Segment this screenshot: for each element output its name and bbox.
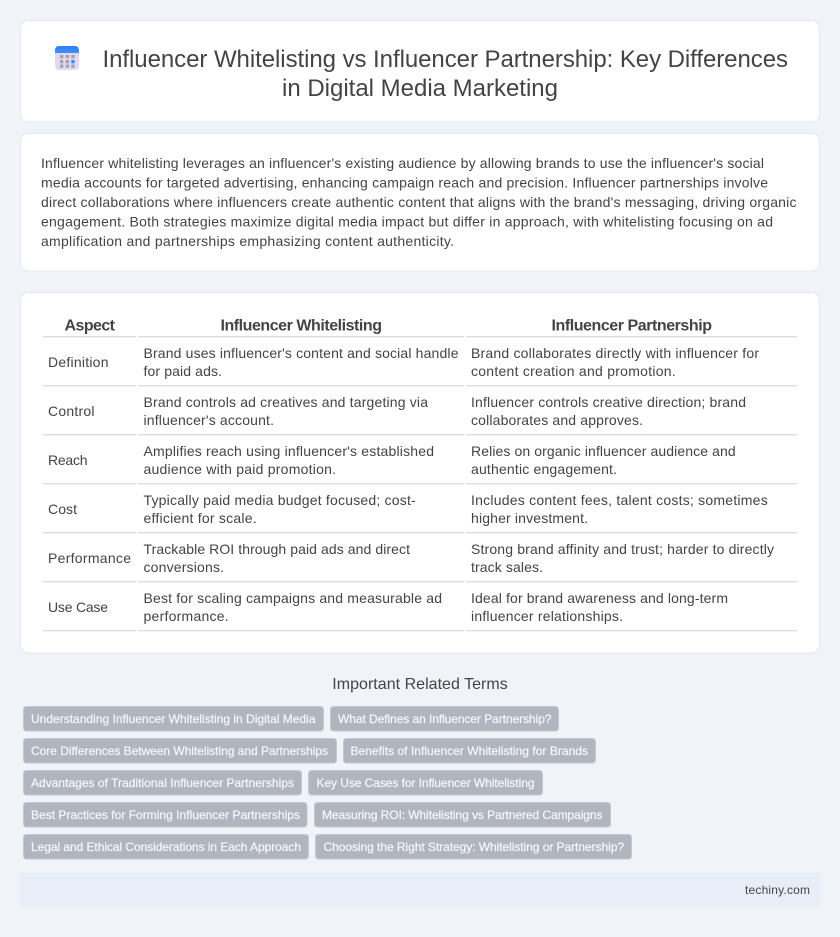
tag: What Defines an Influencer Partnership? (338, 712, 552, 726)
tag (316, 834, 632, 859)
table row: performance: track sales. (471, 559, 543, 575)
table row: performance: Strong brand affinity and trust; harder to directly (471, 541, 774, 557)
text block: introduction: media accounts for targeted advertising, enhancing campaign reach and precision. Influencer partnerships involve (41, 174, 768, 190)
text block: introduction: amplification and partnerships emphasizing content authenticity. (41, 233, 454, 249)
table row: reach (43, 443, 797, 484)
table header (43, 318, 797, 337)
tag: Core Differences Between Whitelisting and Partnerships (31, 744, 328, 758)
table header: Influencer Partnership (552, 318, 712, 334)
footer (20, 873, 820, 907)
table row: performance: Trackable ROI through paid ads and direct (144, 541, 410, 557)
table row: cost (43, 492, 797, 533)
related term tags (24, 706, 632, 859)
table row: definition: Definition (48, 354, 108, 370)
table header: Aspect (64, 318, 116, 334)
tag: Choosing the Right Strategy: Whitelisting or Partnership? (324, 840, 624, 854)
tag: Best Practices for Forming Influencer Partnerships (31, 808, 300, 822)
table row: reach: authentic engagement. (471, 461, 617, 477)
tag (344, 738, 596, 763)
tag: Understanding Influencer Whitelisting in Digital Media (31, 712, 316, 726)
table header: Influencer Whitelisting (220, 318, 382, 334)
footer: techiny.com (745, 883, 810, 897)
table row: cost: higher investment. (471, 510, 588, 526)
table row: use case: influencer relationships. (471, 608, 623, 624)
text block: introduction: engagement. Both strategies maximize digital media impact but differ in approach, with whitelisting focusing on ad (41, 214, 773, 230)
tag (24, 738, 336, 763)
table row: reach: Reach (48, 452, 88, 468)
title: Influencer Whitelisting vs Influencer Partnership: Key Differences (102, 46, 788, 73)
table row: control (43, 394, 797, 435)
text block: introduction: direct collaborations where influencers create authentic content that aligns with the brand's messaging, driving organic (41, 194, 796, 210)
table row: reach: Relies on organic influencer audience and (471, 443, 736, 459)
table row: performance: Performance (48, 550, 131, 566)
table row: cost: Includes content fees, talent costs; sometimes (471, 492, 768, 508)
tag: Legal and Ethical Considerations in Each Approach (31, 840, 301, 854)
table row: definition: Brand collaborates directly with influencer for (471, 345, 759, 361)
table row: control: Control (48, 403, 94, 419)
table row: use case: Ideal for brand awareness and long-term (471, 590, 728, 606)
table row: control: Influencer controls creative direction; brand (471, 394, 746, 410)
table row: definition: for paid ads. (144, 363, 222, 379)
table row: definition: content creation and promotion. (471, 363, 676, 379)
table row: cost: Cost (48, 501, 77, 517)
tag (314, 802, 610, 827)
table row: control: Brand controls ad creatives and targeting via (144, 394, 428, 410)
table row: cost: Typically paid media budget focused; cost- (144, 492, 416, 508)
table row: reach: audience with paid promotion. (144, 461, 336, 477)
tag: Measuring ROI: Whitelisting vs Partnered Campaigns (322, 808, 602, 822)
tag (330, 706, 558, 731)
table row: use case: Use Case (48, 599, 108, 615)
panel: header (20, 20, 820, 122)
table row: performance: conversions. (144, 559, 224, 575)
table row: definition: Brand uses influencer's content and social handle (144, 345, 459, 361)
tag: Advantages of Traditional Influencer Partnerships (31, 776, 294, 790)
table row: performance (43, 541, 797, 582)
table row: definition (43, 345, 797, 386)
table row: use case: performance. (144, 608, 229, 624)
tag (24, 802, 307, 827)
heading: related terms: Important Related Terms (332, 676, 508, 693)
text block: introduction: Influencer whitelisting leverages an influencer's existing audience by allowing brands to use the influencer's social (41, 155, 764, 171)
icon: calendar (55, 46, 79, 70)
table row: reach: Amplifies reach using influencer's established (144, 443, 434, 459)
title: in Digital Media Marketing (282, 75, 558, 102)
text block: introduction (41, 155, 796, 249)
table row: cost: efficient for scale. (144, 510, 257, 526)
table row: control: collaborates and approves. (471, 412, 643, 428)
tag (24, 706, 324, 731)
table row: use case (43, 590, 797, 631)
tag (308, 770, 542, 795)
title (102, 46, 788, 102)
panel: introduction (20, 134, 820, 271)
table row: use case: Best for scaling campaigns and measurable ad (144, 590, 442, 606)
tag (24, 834, 308, 859)
table row: control: influencer's account. (144, 412, 274, 428)
tag: Benefits of Influencer Whitelisting for Brands (350, 744, 588, 758)
tag (24, 770, 302, 795)
tag: Key Use Cases for Influencer Whitelisting (316, 776, 534, 790)
panel: comparison table (20, 292, 820, 653)
